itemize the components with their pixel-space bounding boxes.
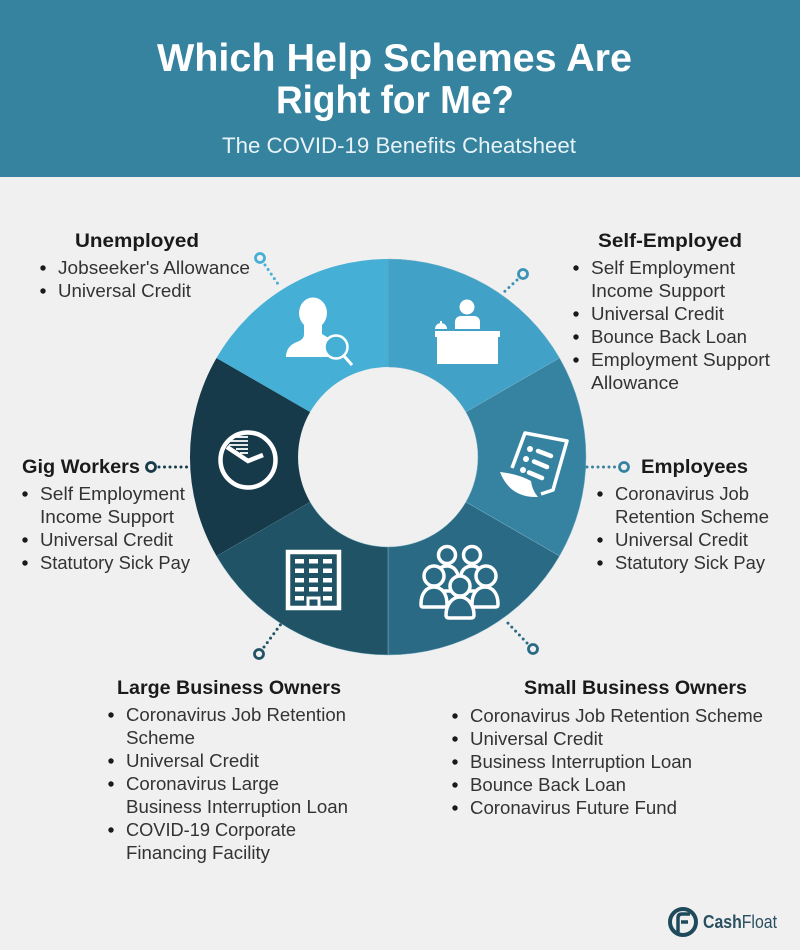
- connector: employees: [587, 462, 628, 472]
- text block: large business owners: Coronavirus Job Retention: [126, 705, 346, 725]
- text block: small business owners: Coronavirus Future Fund: [470, 798, 677, 818]
- text block: small business owners: Small Business Owners: [524, 678, 747, 699]
- text block: large business owners: Scheme: [126, 728, 195, 748]
- text block: unemployed: Unemployed: [75, 231, 199, 252]
- text block: small business owners: [452, 678, 763, 818]
- text block: large business owners: Coronavirus Large: [126, 774, 279, 794]
- text block: small business owners: Coronavirus Job Retention Scheme: [470, 706, 763, 726]
- text block: employees: Retention Scheme: [615, 507, 769, 527]
- segment: gig workers: [190, 358, 310, 556]
- connector: small business owners: [505, 620, 538, 654]
- segment: employees: [466, 358, 586, 556]
- icon: group of people: [421, 546, 498, 618]
- text block: large business owners: [108, 678, 348, 863]
- text block: self-employed: Self Employment: [591, 258, 735, 278]
- text block: large business owners: Universal Credit: [126, 751, 259, 771]
- text block: employees: Coronavirus Job: [615, 484, 749, 504]
- text block: employees: Employees: [641, 457, 748, 478]
- title: [157, 37, 632, 122]
- segment: self-employed: [388, 259, 560, 412]
- text block: self-employed: Self-Employed: [598, 231, 742, 252]
- subtitle: The COVID-19 Benefits Cheatsheet: [222, 133, 576, 158]
- text block: self-employed: Income Support: [591, 281, 725, 301]
- text block: gig workers: Self Employment: [40, 484, 185, 504]
- text block: large business owners: COVID-19 Corporate: [126, 820, 296, 840]
- text block: self-employed: Allowance: [591, 373, 679, 393]
- text block: large business owners: Business Interruption Loan: [126, 797, 348, 817]
- donut chart: [190, 259, 586, 655]
- icon: document: [500, 433, 567, 497]
- text block: unemployed: Jobseeker's Allowance: [58, 258, 250, 278]
- text block: small business owners: Business Interruption Loan: [470, 752, 692, 772]
- connector: large business owners: [254, 624, 281, 658]
- icon: office building: [288, 552, 339, 608]
- text block: gig workers: Gig Workers: [22, 457, 140, 478]
- segment: unemployed: [216, 259, 388, 412]
- text block: employees: Statutory Sick Pay: [615, 553, 765, 573]
- text block: self-employed: [573, 231, 770, 393]
- text block: self-employed: Bounce Back Loan: [591, 327, 747, 347]
- logo: CashFloat: [670, 909, 777, 935]
- title: Which Help Schemes Are: [157, 37, 632, 80]
- icon: clock: [220, 432, 276, 488]
- connector: gig workers: [146, 462, 189, 472]
- text block: self-employed: Universal Credit: [591, 304, 724, 324]
- text block: large business owners: Large Business Owners: [117, 678, 341, 699]
- icon: person with magnifier: [286, 298, 352, 365]
- connector: unemployed: [256, 254, 278, 284]
- text block: unemployed: Universal Credit: [58, 281, 191, 301]
- text block: self-employed: Employment Support: [591, 350, 770, 370]
- text block: employees: Universal Credit: [615, 530, 748, 550]
- text block: small business owners: Universal Credit: [470, 729, 603, 749]
- text block: small business owners: Bounce Back Loan: [470, 775, 626, 795]
- text block: gig workers: Income Support: [40, 507, 174, 527]
- header banner: [0, 0, 800, 177]
- text block: large business owners: Financing Facility: [126, 843, 270, 863]
- segment: small business owners: [388, 502, 560, 655]
- text block: gig workers: [22, 457, 190, 573]
- icon: reception desk: [435, 300, 500, 364]
- title: Right for Me?: [276, 79, 514, 122]
- logo: CashFloat: CashFloat: [703, 912, 777, 932]
- text block: unemployed: [40, 231, 250, 301]
- connector: self-employed: [504, 270, 528, 292]
- text block: gig workers: Statutory Sick Pay: [40, 553, 190, 573]
- text block: gig workers: Universal Credit: [40, 530, 173, 550]
- text block: employees: [597, 457, 769, 573]
- segment: large business owners: [216, 502, 388, 655]
